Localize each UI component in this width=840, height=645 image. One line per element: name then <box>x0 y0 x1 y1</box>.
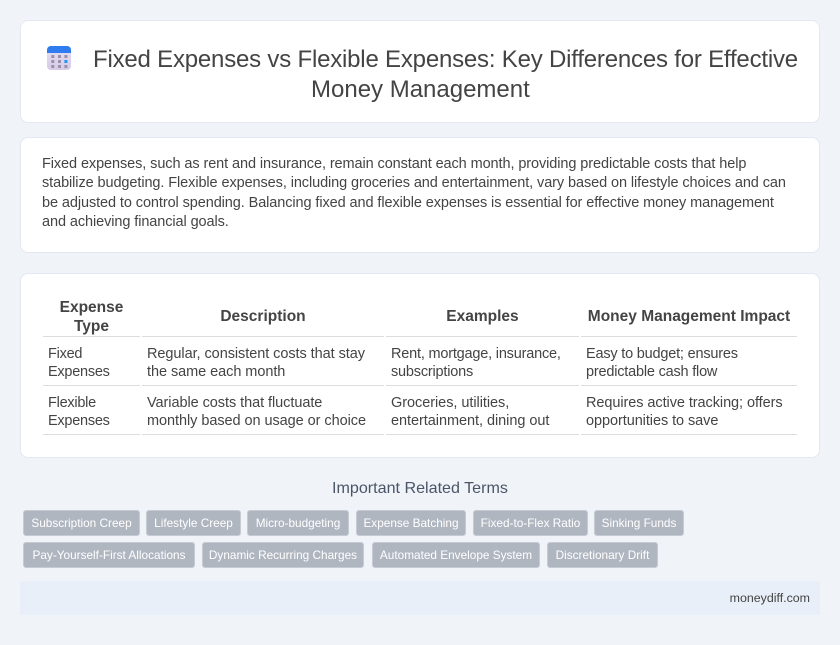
intro paragraph: and achieving financial goals. <box>42 214 229 230</box>
panel: title card <box>20 20 820 123</box>
row: fixed expenses: Fixed <box>48 346 82 362</box>
panel: comparison table: Requires active tracking; offers <box>586 395 783 411</box>
intro paragraph: be adjusted to control spending. Balancing fixed and flexible expenses is essential for effective money management <box>42 194 774 210</box>
tags: Discretionary Drift <box>556 548 649 562</box>
tags: Subscription Creep <box>31 516 132 530</box>
panel: comparison table: entertainment, dining out <box>391 413 549 429</box>
panel: comparison table: predictable cash flow <box>586 364 717 380</box>
panel: comparison table: monthly based on usage or choice <box>147 413 366 429</box>
title: Fixed Expenses vs Flexible Expenses: Key Differences for Effective <box>93 46 798 73</box>
tags: Dynamic Recurring Charges <box>209 548 357 562</box>
related terms heading: Important Related Terms <box>332 479 508 497</box>
panel: comparison table: Description <box>220 308 306 325</box>
table header: Expense <box>60 299 123 316</box>
intro paragraph <box>42 156 786 230</box>
tags: Fixed-to-Flex Ratio <box>481 516 580 530</box>
panel: comparison table: Examples <box>446 308 519 325</box>
tags: Pay-Yourself-First Allocations <box>32 548 186 562</box>
panel: intro text <box>20 137 820 253</box>
tags: Expense Batching <box>363 516 459 530</box>
tags: Sinking Funds <box>602 516 676 530</box>
panel: comparison table: Money Management Impact <box>588 308 790 325</box>
footer brand: moneydiff.com <box>730 591 810 605</box>
footer <box>20 581 820 615</box>
tags: Automated Envelope System <box>380 548 532 562</box>
row: flexible expenses: Expenses <box>48 413 110 429</box>
table header <box>60 299 123 335</box>
tags: Micro-budgeting <box>256 516 340 530</box>
title: Money Management <box>311 76 530 102</box>
panel: comparison table: Variable costs that fluctuate <box>147 395 322 411</box>
title <box>93 46 798 102</box>
icon: calendar <box>47 46 71 70</box>
intro paragraph: stabilize budgeting. Flexible expenses, including groceries and entertainment, vary based on lifestyle choices and can <box>42 175 786 191</box>
panel: comparison table: Rent, mortgage, insurance, <box>391 346 561 362</box>
panel: comparison table: opportunities to save <box>586 413 718 429</box>
tags: Lifestyle Creep <box>154 516 233 530</box>
panel: comparison table <box>20 273 820 458</box>
panel: comparison table: subscriptions <box>391 364 473 380</box>
row: flexible expenses <box>48 395 110 429</box>
panel: comparison table: Easy to budget; ensures <box>586 346 738 362</box>
row: fixed expenses: Expenses <box>48 364 110 380</box>
panel: comparison table: Regular, consistent costs that stay <box>147 346 365 362</box>
tags <box>23 510 684 568</box>
panel: comparison table: the same each month <box>147 364 285 380</box>
intro paragraph: Fixed expenses, such as rent and insurance, remain constant each month, providing predictable costs that help <box>42 156 746 172</box>
panel: comparison table: Groceries, utilities, <box>391 395 509 411</box>
row: fixed expenses <box>48 346 110 380</box>
table header: Type <box>74 318 109 335</box>
row: flexible expenses: Flexible <box>48 395 96 411</box>
